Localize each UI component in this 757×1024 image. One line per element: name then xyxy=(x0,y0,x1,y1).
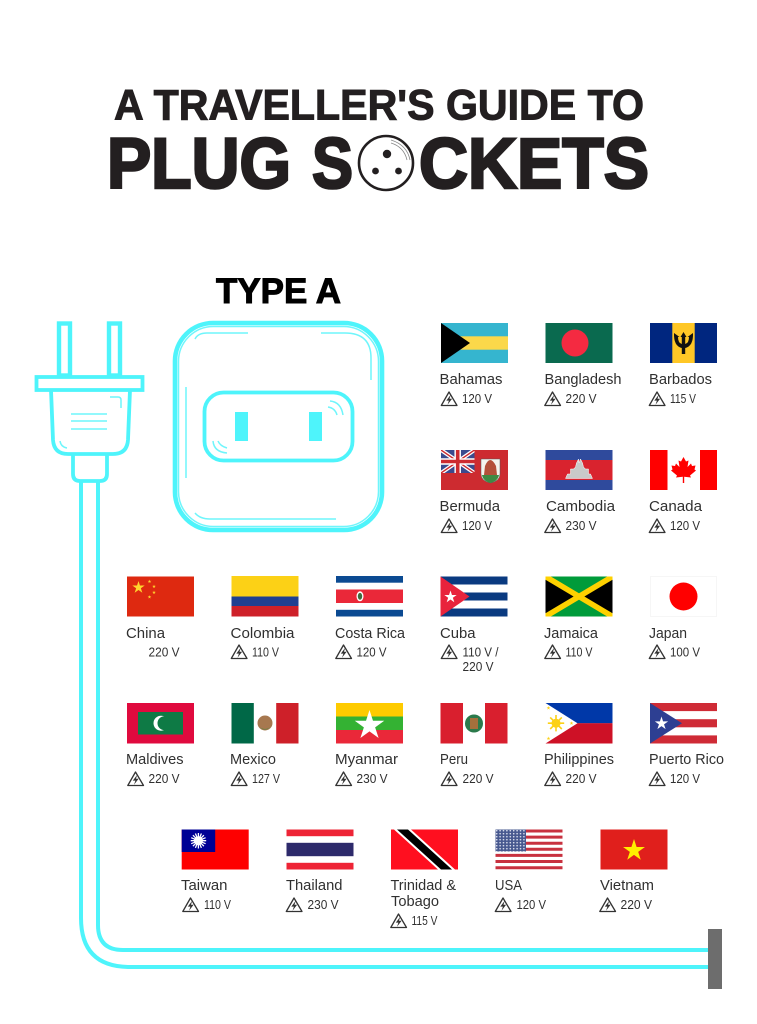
title xyxy=(107,82,649,204)
plug body xyxy=(36,377,142,481)
country: Bermuda xyxy=(440,450,508,533)
plug prongs xyxy=(59,324,120,376)
name: Trinidad & xyxy=(390,877,456,894)
voltage: 100 V xyxy=(670,646,701,660)
name: Bermuda xyxy=(440,498,501,515)
flag xyxy=(336,703,403,744)
country: Colombia xyxy=(230,576,298,660)
voltage: 120 V xyxy=(356,646,387,660)
name: Vietnam xyxy=(600,877,654,894)
voltage: 110 V / xyxy=(462,646,499,660)
country: Puerto Rico xyxy=(649,703,724,786)
voltage: 115 V xyxy=(412,914,438,928)
voltage: 230 V xyxy=(308,898,339,912)
voltage: 220 V xyxy=(148,646,180,660)
flag xyxy=(232,703,298,744)
country: Taiwan xyxy=(181,830,249,912)
name: Myanmar xyxy=(335,751,398,768)
name: Cuba xyxy=(440,625,476,642)
voltage: 110 V xyxy=(566,646,593,660)
name: Canada xyxy=(649,498,703,515)
voltage: 115 V xyxy=(670,392,697,406)
country: Costa Rica xyxy=(335,576,406,660)
flag xyxy=(650,323,717,363)
country: Bahamas xyxy=(440,323,508,406)
country: Peru xyxy=(440,703,508,786)
flag xyxy=(232,576,298,616)
country: Cambodia xyxy=(545,450,616,533)
country: China xyxy=(126,576,194,660)
country: Thailand xyxy=(286,830,354,912)
voltage: 120 V xyxy=(516,898,547,912)
name: Costa Rica xyxy=(335,625,406,642)
name: Philippines xyxy=(544,751,614,768)
name: USA xyxy=(495,877,522,894)
flag xyxy=(650,450,717,490)
name: Colombia xyxy=(230,625,295,642)
flag xyxy=(546,703,612,744)
flag xyxy=(650,703,717,744)
flag xyxy=(440,576,508,616)
name: Jamaica xyxy=(544,625,599,642)
title line 1: A TRAVELLER'S GUIDE TO xyxy=(114,82,644,130)
flag xyxy=(600,830,668,870)
voltage: 127 V xyxy=(252,772,281,786)
country: Barbados xyxy=(649,323,717,406)
country: Trinidad & Tobago xyxy=(390,830,458,928)
country: USA xyxy=(495,830,562,912)
name: Mexico xyxy=(230,751,276,768)
flag xyxy=(182,830,249,870)
icon: type A socket xyxy=(175,323,382,530)
cable xyxy=(81,481,709,967)
voltage: 110 V xyxy=(252,646,280,660)
voltage: 120 V xyxy=(462,519,493,533)
country: Philippines xyxy=(544,703,614,786)
voltage: 220 V xyxy=(148,772,180,786)
title letters: CKETS: CKETS xyxy=(419,125,649,204)
voltage: 220 V xyxy=(566,392,597,406)
name: Maldives xyxy=(126,751,184,768)
flag xyxy=(496,830,562,870)
flag xyxy=(650,577,717,616)
flag xyxy=(441,450,508,490)
name: Thailand xyxy=(286,877,342,894)
flag xyxy=(391,830,458,870)
voltage: 220 V xyxy=(462,772,494,786)
name: Bahamas xyxy=(440,371,502,388)
name: Peru xyxy=(440,751,468,768)
flag xyxy=(336,576,403,616)
title word: PLUG: PLUG xyxy=(107,125,291,204)
country: Maldives xyxy=(126,703,194,786)
name: Cambodia xyxy=(546,498,616,515)
flag xyxy=(546,323,612,363)
voltage: 230 V xyxy=(356,772,388,786)
voltage: 220 V xyxy=(462,660,494,674)
name: Barbados xyxy=(649,371,712,388)
flag xyxy=(127,703,194,744)
name: China xyxy=(126,625,166,642)
title letter: S: S xyxy=(312,125,353,204)
voltage: 220 V xyxy=(566,772,597,786)
flag xyxy=(127,576,194,616)
voltage: 120 V xyxy=(670,519,701,533)
voltage: 110 V xyxy=(204,898,232,912)
country: Cuba xyxy=(440,576,508,674)
name: Taiwan xyxy=(181,877,228,894)
heading: Type A: TYPE A xyxy=(216,272,341,311)
country: Japan xyxy=(649,577,717,660)
name line 2: Tobago xyxy=(391,893,439,910)
flag xyxy=(546,450,612,490)
flag xyxy=(286,830,354,870)
icon: socket letter O xyxy=(359,136,413,190)
flag xyxy=(546,576,612,616)
icon: plug and cable xyxy=(36,324,722,989)
voltage: 230 V xyxy=(566,519,597,533)
country: Mexico xyxy=(230,703,298,786)
name: Japan xyxy=(649,625,687,642)
name: Puerto Rico xyxy=(649,751,724,768)
country: Canada xyxy=(649,450,717,533)
country: Vietnam xyxy=(600,830,668,912)
voltage: 120 V xyxy=(670,772,701,786)
flag xyxy=(441,323,508,363)
country: Myanmar xyxy=(335,703,403,786)
voltage: 220 V xyxy=(620,898,653,912)
cable end xyxy=(708,929,722,989)
name: Bangladesh xyxy=(544,371,622,388)
country: Bangladesh xyxy=(544,323,622,406)
country: Jamaica xyxy=(544,576,612,660)
flag xyxy=(440,703,508,744)
voltage: 120 V xyxy=(462,392,493,406)
voltage xyxy=(441,645,499,674)
